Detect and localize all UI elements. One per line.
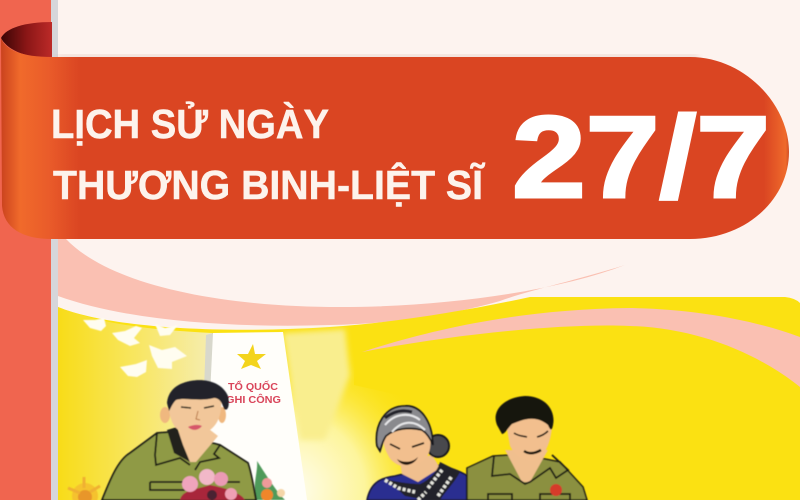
left red strip	[0, 0, 51, 500]
pockets	[488, 494, 570, 500]
face	[383, 427, 430, 467]
hair	[167, 380, 229, 411]
date 27/7: 27/7	[512, 92, 770, 222]
young man	[467, 396, 587, 500]
yellow illustration panel	[58, 297, 800, 500]
old woman	[367, 406, 483, 500]
pink swoosh below ribbon	[58, 239, 625, 326]
hair	[377, 406, 433, 451]
face	[160, 407, 170, 423]
olive shirt	[467, 455, 587, 500]
collar	[155, 433, 220, 470]
monument inscription: TỔ QUỐC	[228, 379, 278, 393]
collar	[492, 455, 568, 484]
soldier with flowers	[102, 380, 256, 500]
title line 1: LỊCH SỬ NGÀY	[51, 101, 329, 147]
neck	[400, 455, 440, 482]
face	[505, 416, 552, 461]
neck	[170, 426, 218, 462]
neck	[505, 450, 548, 482]
pale sky right of monument	[283, 329, 350, 440]
blue dress	[367, 465, 483, 500]
uniform	[102, 432, 256, 500]
eyes and mouth	[181, 406, 214, 408]
icon: red badge	[550, 484, 562, 496]
ribbon fold	[1, 22, 52, 58]
bouquet	[180, 485, 245, 500]
flowers right of soldier	[254, 461, 285, 500]
hair	[496, 396, 553, 434]
icon: white doves	[83, 318, 187, 377]
left sky gradient	[58, 307, 212, 500]
pocket	[150, 482, 240, 490]
sunflower	[68, 477, 100, 500]
bun	[427, 435, 449, 457]
grey strip	[51, 0, 58, 500]
scarf	[382, 462, 460, 500]
icon: star	[237, 344, 266, 369]
ribbon banner	[1, 38, 789, 239]
features	[514, 431, 548, 437]
second pink swoosh	[362, 308, 800, 387]
features	[390, 443, 424, 449]
monument inscription	[226, 379, 281, 406]
monument inscription: GHI CÔNG	[226, 393, 281, 406]
ribbon shadow	[58, 54, 698, 58]
title line 2: THƯƠNG BINH-LIỆT SĨ	[53, 162, 485, 208]
pale glow behind figures	[283, 328, 470, 500]
monument	[200, 332, 307, 500]
